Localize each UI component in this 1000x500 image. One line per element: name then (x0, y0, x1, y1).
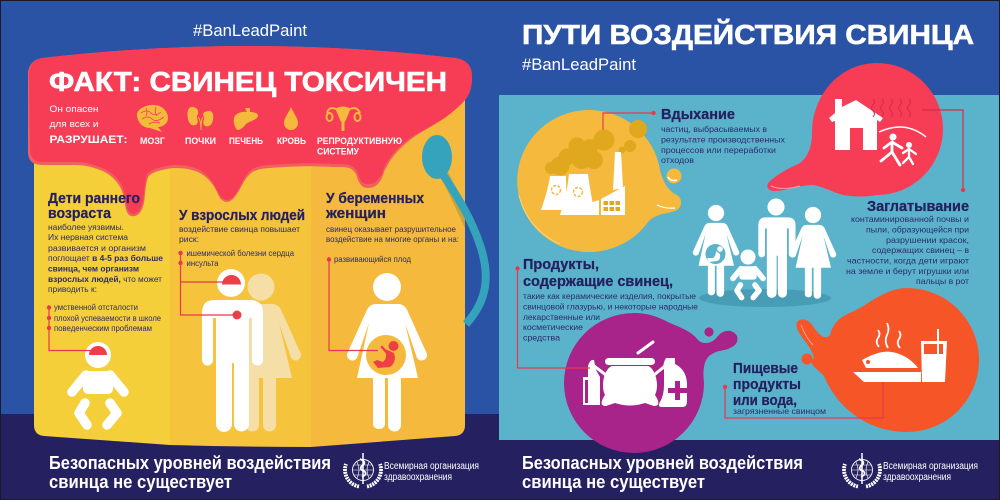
heading: young children: Дети раннего (48, 191, 140, 207)
title: ФАКТ: СВИНЕЦ ТОКСИЧЕН (49, 66, 447, 97)
body text: products: лекарственные или (523, 312, 600, 322)
bullet list: effects on children: умственной отсталости (54, 302, 138, 312)
paint brush (422, 135, 486, 324)
left footer text (49, 453, 331, 492)
bullet list: effects on children: поведенческим проблемам (54, 323, 152, 333)
left WHO name (384, 461, 479, 483)
label: reproductive system: РЕПРОДУКТИВНУЮ (317, 136, 402, 146)
right panel: teal background (499, 95, 1000, 440)
body text: inhalation: отходов (661, 155, 694, 165)
intro text: Он опасен (50, 104, 99, 114)
column 1: young children (47, 191, 163, 425)
icon: running children (881, 134, 916, 165)
heading: food and water: Пищевые (733, 361, 798, 377)
heading: food and water: или вода, (733, 393, 797, 409)
pregnant mother (693, 205, 739, 297)
right footer text (522, 453, 803, 492)
red blob: ingestion (767, 63, 943, 196)
body text: pregnant women (326, 224, 459, 264)
connector line: ingestion (922, 110, 965, 192)
heading: ingestion: Заглатывание (867, 199, 969, 215)
right footer text: Безопасных уровней воздействия (522, 453, 803, 473)
body text: ingestion: пыли, образующейся при (866, 224, 969, 234)
icon: hot food and glass (853, 323, 947, 382)
right WHO name (883, 461, 978, 483)
heading: food and water: продукты (733, 377, 801, 393)
body text: adults: воздействие свинца повышает (179, 224, 300, 234)
woman silhouette behind man (246, 274, 301, 432)
right WHO logo (844, 453, 880, 486)
body text: pregnant women: развивающийся плод (334, 254, 411, 264)
right panel: navy footer band (499, 440, 1000, 500)
body text: inhalation (661, 124, 786, 165)
body text: products: косметические (523, 322, 583, 332)
family group (693, 198, 836, 307)
body text: ingestion: на земле и берут игрушки или (846, 266, 969, 276)
red fetus (373, 341, 398, 368)
bullet list: effects on children (54, 302, 161, 333)
body text: inhalation: результате производственных (661, 134, 786, 144)
right WHO name: здравоохранения (883, 472, 951, 483)
body text: young children: наиболее уязвимы. (48, 222, 124, 232)
body text: pregnant women: воздействие на многие органы и на: (326, 234, 459, 244)
body text: young children: поглощает в 4-5 раз больше (48, 253, 163, 263)
child (733, 249, 763, 298)
red markers on man (222, 275, 242, 320)
body text: adults (179, 224, 300, 268)
body text: ingestion: пальцы в рот (916, 276, 969, 286)
body text: adults: инсульта (186, 258, 219, 268)
left panel: navy footer band (0, 414, 500, 500)
icon: blood drop (284, 107, 298, 130)
icon: fumes (872, 99, 910, 117)
heading: young children: возраста (48, 206, 112, 222)
body text: products: такие как керамические изделия, покрытые (523, 291, 696, 301)
body text: young children (48, 222, 163, 294)
family ground shadow (699, 289, 831, 307)
column 3: pregnant women (325, 191, 459, 432)
intro text: РАЗРУШАЕТ: (50, 134, 128, 146)
pregnant woman figure (347, 273, 427, 432)
connector line: baby (47, 305, 92, 350)
connector line: food (723, 382, 883, 418)
icon: factory with smoke (541, 120, 647, 215)
heading: pregnant women (325, 191, 424, 222)
red paint splash header (28, 46, 472, 216)
body text: young children: взрослых людей, что может (48, 274, 162, 284)
body text: ingestion (846, 214, 969, 286)
left WHO logo (345, 453, 381, 486)
heading: pregnant women: женщин (325, 206, 386, 222)
icon: brain (137, 105, 168, 132)
connector line: products (515, 266, 590, 368)
right panel: blue header (499, 0, 1000, 95)
body text: ingestion: разрушении красок, (886, 235, 969, 245)
icon: ground arc (879, 127, 926, 137)
mother's belly with fetus (705, 244, 726, 264)
body text: ingestion: содержащих свинец – в (872, 245, 969, 255)
red brain marker on baby (89, 346, 107, 355)
left WHO name: Всемирная организация (384, 461, 479, 472)
connector line: inhalation (603, 111, 656, 130)
heading: pregnant women: У беременных (326, 191, 424, 207)
orange blob: food and water (796, 288, 979, 432)
connector line: adults (178, 251, 237, 315)
label: liver: ПЕЧЕНЬ (229, 136, 263, 146)
heading: inhalation: Вдыхание (661, 107, 735, 123)
icon: house (829, 99, 883, 150)
heading: products: содержащие свинец, (523, 274, 673, 290)
bullet list: effects on children: плохой успеваемости в школе (54, 313, 161, 323)
baby figure (72, 342, 124, 425)
heading: young children (48, 191, 140, 222)
icon: reproductive system (326, 107, 360, 131)
right WHO name: Всемирная организация (883, 461, 978, 472)
intro text: для всех и (50, 119, 98, 129)
woman (790, 207, 836, 299)
father (758, 198, 796, 298)
body text: products: свинцовой глазурью, и некоторые народные (523, 302, 698, 312)
left footer text: Безопасных уровней воздействия (49, 453, 331, 473)
body text: products: средства (523, 332, 560, 342)
yellow blob: inhalation (517, 110, 682, 252)
intro text (50, 104, 128, 146)
body text: young children: приводить к: (48, 284, 97, 294)
left WHO name: здравоохранения (384, 472, 452, 483)
label: reproductive system: СИСТЕМУ (317, 146, 359, 156)
body text: pregnant women: свинец оказывает разрушительное (326, 224, 456, 234)
heading: food and water (733, 361, 801, 409)
body text: ingestion: частности, когда дети играют (847, 256, 969, 266)
body text: ingestion: контаминированной почвы и (851, 214, 969, 224)
purple blob: products (564, 313, 738, 453)
right title: ПУТИ ВОЗДЕЙСТВИЯ СВИНЦА (522, 18, 974, 50)
body text: young children: свинца, чем организм (48, 264, 139, 274)
right hashtag: #BanLeadPaint (522, 55, 636, 74)
left panel: blue background (0, 0, 500, 500)
body text: inhalation: частиц, выбрасываемых в (661, 124, 767, 134)
right footer text: свинца не существует (522, 472, 705, 492)
icon: pot, cosmetics and medicine (583, 342, 687, 407)
label: brain: МОЗГ (140, 136, 165, 146)
body text: young children: развивается и организм (48, 243, 146, 253)
label: reproductive system (317, 136, 402, 156)
label: kidneys: ПОЧКИ (185, 136, 216, 146)
heading: adults: У взрослых людей (179, 208, 305, 224)
column 2: adults (178, 208, 305, 432)
connector line: fetus (327, 257, 378, 350)
left hashtag: #BanLeadPaint (193, 21, 307, 40)
man figure (202, 269, 263, 432)
body text: young children: Их нервная система (48, 232, 128, 242)
label: blood: КРОВЬ (277, 136, 306, 146)
body text: adults: риск: (179, 234, 199, 244)
body text: adults: ишемической болезни сердца (186, 248, 294, 258)
heading: products (523, 257, 673, 290)
body text: inhalation: процессов или переработки (661, 145, 776, 155)
heading: products: Продукты, (523, 257, 599, 273)
body text: food and water: загрязненные свинцом (733, 406, 826, 416)
icon: kidneys (188, 107, 213, 130)
left footer text: свинца не существует (49, 472, 232, 492)
body text: products (523, 291, 698, 342)
icon: liver (234, 108, 258, 130)
belly circle (366, 335, 406, 375)
panel: paint bucket body (34, 100, 465, 447)
